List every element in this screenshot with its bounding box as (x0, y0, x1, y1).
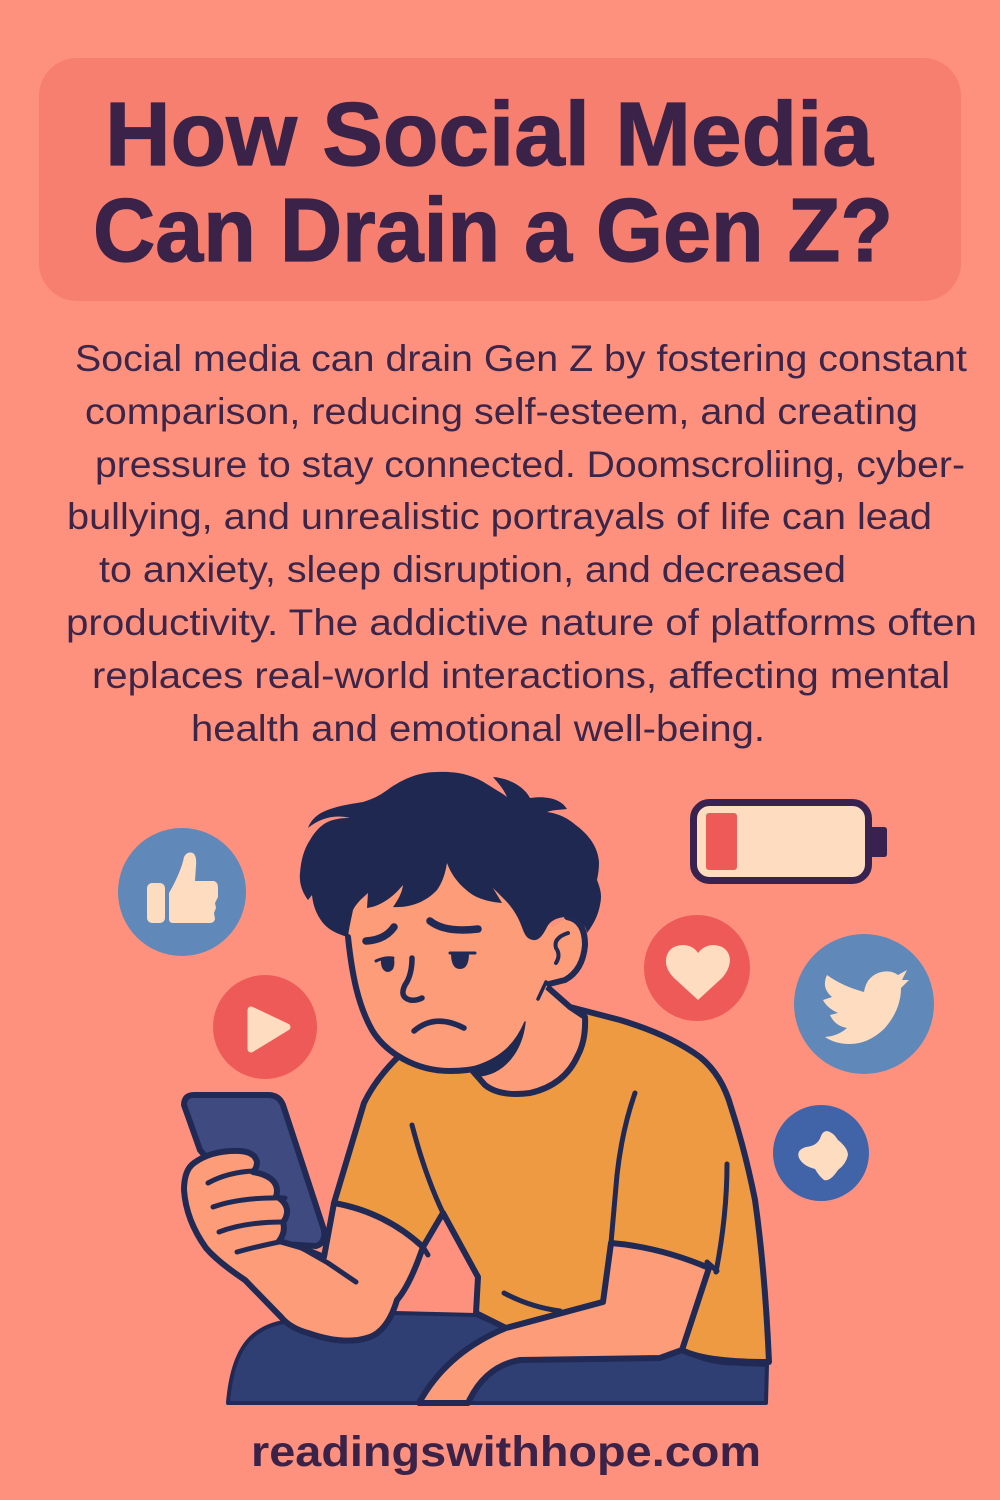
icon: heart (644, 915, 750, 1021)
intro paragraph: Social media can drain Gen Z by fostering constant (75, 338, 968, 379)
intro paragraph: replaces real-world interactions, affecting mental (92, 655, 950, 696)
intro paragraph: to anxiety, sleep disruption, and decreased (99, 549, 846, 590)
left eyebrow (366, 927, 394, 941)
left eye (376, 958, 394, 972)
jaw shadow (470, 1022, 525, 1076)
right eyebrow (430, 921, 478, 930)
phone (184, 1095, 324, 1246)
intro paragraph: productivity. The addictive nature of platforms often (66, 602, 977, 643)
holding arm and hand (184, 1151, 423, 1341)
hair (300, 772, 601, 940)
intro paragraph: comparison, reducing self-esteem, and creating (85, 391, 918, 432)
face (348, 860, 560, 1071)
title banner (39, 58, 961, 301)
right forearm (419, 1243, 709, 1403)
right leg (468, 1350, 767, 1403)
t-shirt torso (334, 1007, 769, 1362)
icon: small blue badge (773, 1105, 869, 1201)
intro paragraph: pressure to stay connected. Doomscroliing, cyber- (95, 444, 965, 485)
icon: low battery (694, 802, 887, 880)
title banner: How Social Media (105, 85, 874, 185)
icon: play button (213, 975, 317, 1079)
icon: bird (794, 934, 934, 1074)
shirt fold lines (412, 1093, 727, 1311)
intro paragraph (66, 338, 977, 749)
illustration: sad young man looking at phone (184, 772, 769, 1403)
icon: thumbs up (118, 828, 246, 956)
mouth (414, 1021, 464, 1031)
ear (535, 917, 585, 985)
neck (470, 985, 585, 1094)
intro paragraph: health and emotional well-being. (191, 708, 765, 749)
left leg (228, 1313, 506, 1403)
title banner: Can Drain a Gen Z? (93, 181, 893, 281)
nose (403, 958, 422, 1000)
cheek notch (538, 982, 546, 999)
website footer: readingswithhope.com (251, 1428, 761, 1476)
face outline (348, 937, 482, 1071)
right eye (450, 953, 475, 969)
intro paragraph: bullying, and unrealistic portrayals of life can lead (67, 496, 932, 537)
hand finger and elbow lines (208, 1171, 428, 1282)
